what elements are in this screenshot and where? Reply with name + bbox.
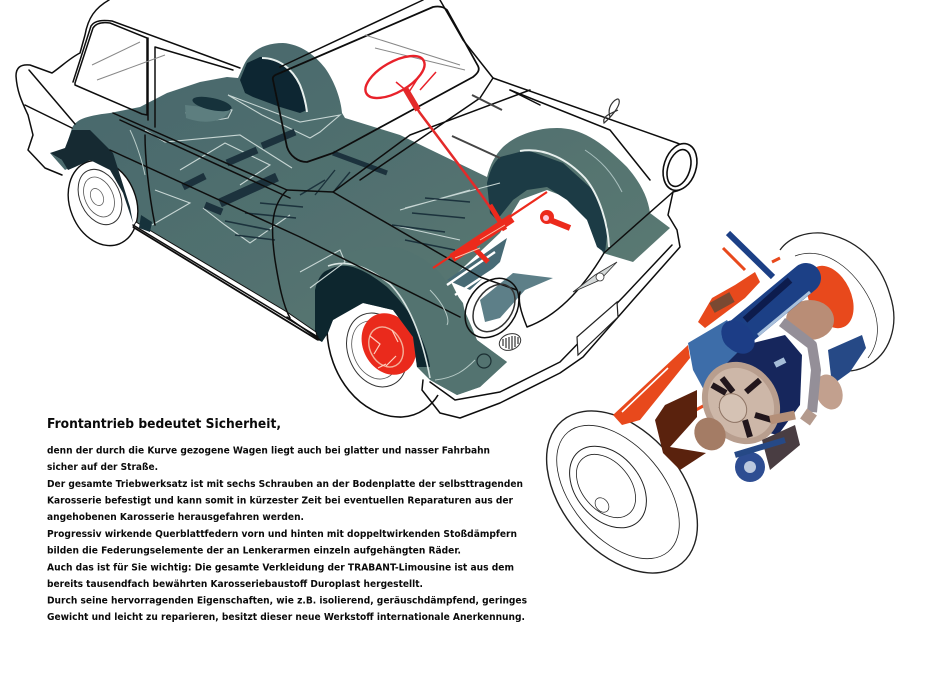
top rod: [728, 233, 773, 277]
right headlight: [657, 139, 703, 195]
silver exhaust pipe: [782, 322, 816, 412]
window reflections: [92, 35, 465, 80]
alternator: [688, 411, 732, 457]
left headlight: [454, 268, 530, 348]
bonnet hood ornament: [604, 99, 619, 123]
white body silhouette: [16, 0, 695, 418]
green floor pan and fenders: [50, 43, 670, 395]
front wheel arch shadow: [315, 266, 430, 367]
illustration: transparent Trabant car body: [16, 0, 703, 418]
dark engine body: [705, 335, 802, 435]
fender glints: [130, 130, 475, 380]
body copy: Der gesamte Triebwerksatz ist mit sechs Schrauben an der Bodenplatte der selbsttragenden: [47, 479, 523, 490]
rear tire: [56, 150, 150, 256]
light blue engine block: [688, 320, 745, 392]
starter motor: [762, 425, 800, 470]
body copy: bereits tausendfach bewährten Karosseriebaustoff Duroplast hergestellt.: [47, 579, 423, 590]
fan pulley: [686, 347, 796, 459]
licence plate: [577, 302, 618, 355]
front tire with red brake drum: [327, 300, 438, 417]
body copy: bilden die Federungselemente der an Lenkerarmen einzeln aufgehängten Räder.: [47, 546, 461, 556]
orange subframe: [613, 248, 780, 425]
front fender: [347, 247, 507, 395]
sill strip: [133, 222, 318, 340]
heading: Frontantrieb bedeutet Sicherheit,: [47, 417, 281, 432]
car outline: [16, 0, 695, 418]
grille vent: [497, 331, 523, 353]
body copy: sicher auf der Straße.: [47, 462, 158, 473]
text block: [47, 417, 527, 623]
body copy: denn der durch die Kurve gezogene Wagen liegt auch bei glatter und nasser Fahrbahn: [47, 446, 490, 456]
windscreen wiper: [452, 95, 502, 158]
engine bay detail: [447, 238, 553, 322]
floor pressings: [145, 95, 500, 288]
front side marker: [477, 354, 491, 368]
rear wheelhouse behind seat: [240, 57, 307, 113]
floor tunnel and dark ribs: [183, 132, 470, 250]
steering assembly in red: [359, 48, 570, 268]
body copy: Progressiv wirkende Querblattfedern vorn und hinten mit doppeltwirkenden Stoßdämpfern: [47, 529, 517, 540]
beige differential cover: [811, 371, 847, 413]
beige gear housing: [786, 300, 834, 340]
blue pump: [828, 335, 866, 385]
body copy: Auch das ist für Sie wichtig: Die gesamte Verkleidung der TRABANT-Limousine ist aus dem: [47, 562, 514, 574]
body copy: Karosserie befestigt und kann somit in kürzester Zeit bei eventuellen Reparaturen aus der: [47, 496, 513, 506]
steering rack: [433, 192, 547, 268]
lower blue pulley: [735, 452, 765, 482]
brown suspension arm: [655, 390, 706, 470]
front wheelhouse shadow: [487, 150, 608, 253]
steering column: [405, 90, 497, 217]
steering wheel: [359, 48, 431, 106]
body copy: angehobenen Karosserie herausgefahren werden.: [47, 512, 304, 523]
air filter cylinder: [715, 278, 810, 360]
brake disc: [797, 258, 863, 336]
illustration: detached engine and front axle: [516, 233, 894, 602]
body copy: [47, 446, 527, 623]
body copy: Gewicht und leicht zu reparieren, besitzt dieser neue Werkstoff internationale Anerkennung.: [47, 612, 525, 623]
tie rod end: [540, 210, 554, 224]
coil spring: [712, 297, 732, 308]
rear wheel arch shadow: [50, 130, 133, 223]
body copy: Durch seine hervorragenden Eigenschaften, wie z.B. isolierend, geräuschdämpfend, geringes: [47, 596, 527, 606]
fuel tank cap in floor: [185, 94, 233, 122]
bonnet emblem: [573, 262, 617, 292]
near front tire: [516, 382, 728, 602]
far front tire: [780, 233, 894, 371]
